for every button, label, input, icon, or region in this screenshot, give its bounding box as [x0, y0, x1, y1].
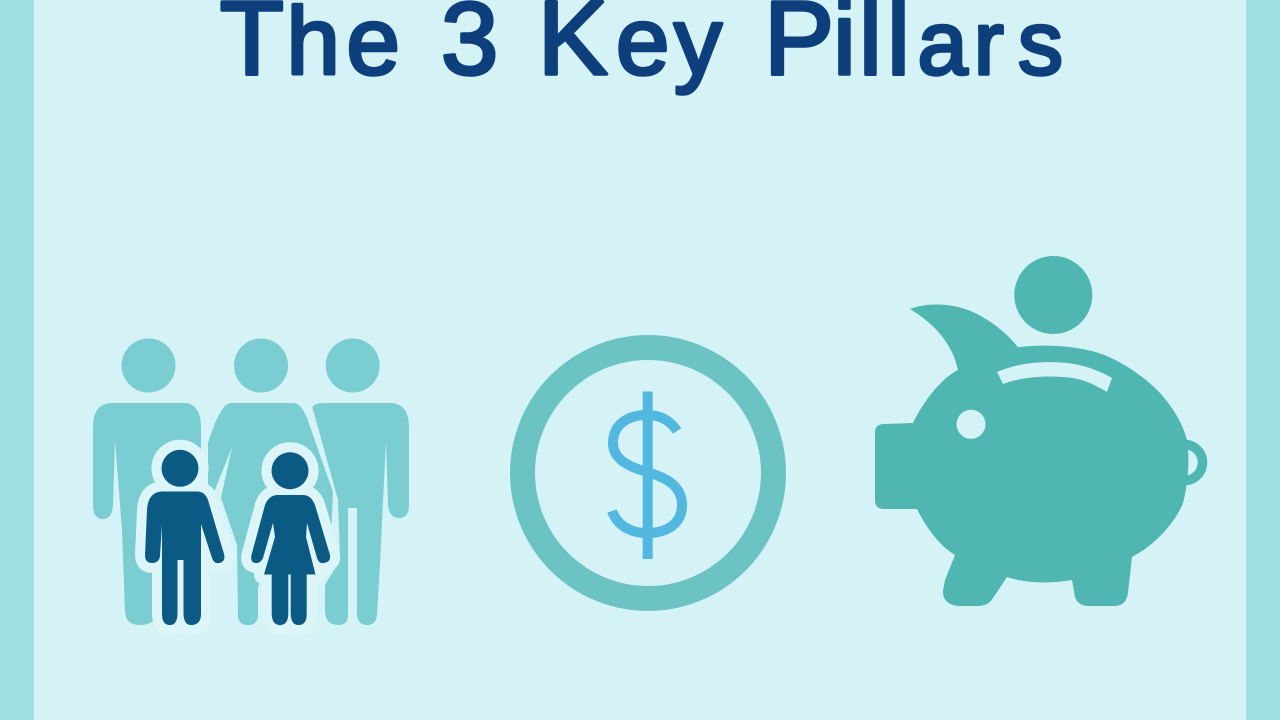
dollar sign: [612, 392, 682, 559]
adult figure left: [93, 338, 201, 625]
right border band: [1246, 0, 1280, 720]
boy silhouette: [145, 450, 224, 625]
left border band: [0, 0, 34, 720]
adult figure right: [312, 338, 409, 625]
icon: dollar coin: [522, 348, 774, 598]
coin: [1014, 256, 1092, 334]
child girl: [251, 452, 330, 625]
boy outline halo: [145, 450, 224, 625]
pig eye: [956, 410, 986, 439]
pig tail: [1166, 444, 1202, 480]
pig body: [875, 304, 1188, 606]
child boy: [145, 450, 224, 625]
icon: family group: [93, 338, 409, 625]
girl silhouette: [251, 452, 330, 625]
icon: piggy bank: [875, 256, 1202, 606]
adult figure middle: [208, 338, 333, 625]
coin slot: [997, 362, 1112, 392]
coin ring: [522, 348, 774, 598]
girl outline halo: [251, 452, 330, 625]
